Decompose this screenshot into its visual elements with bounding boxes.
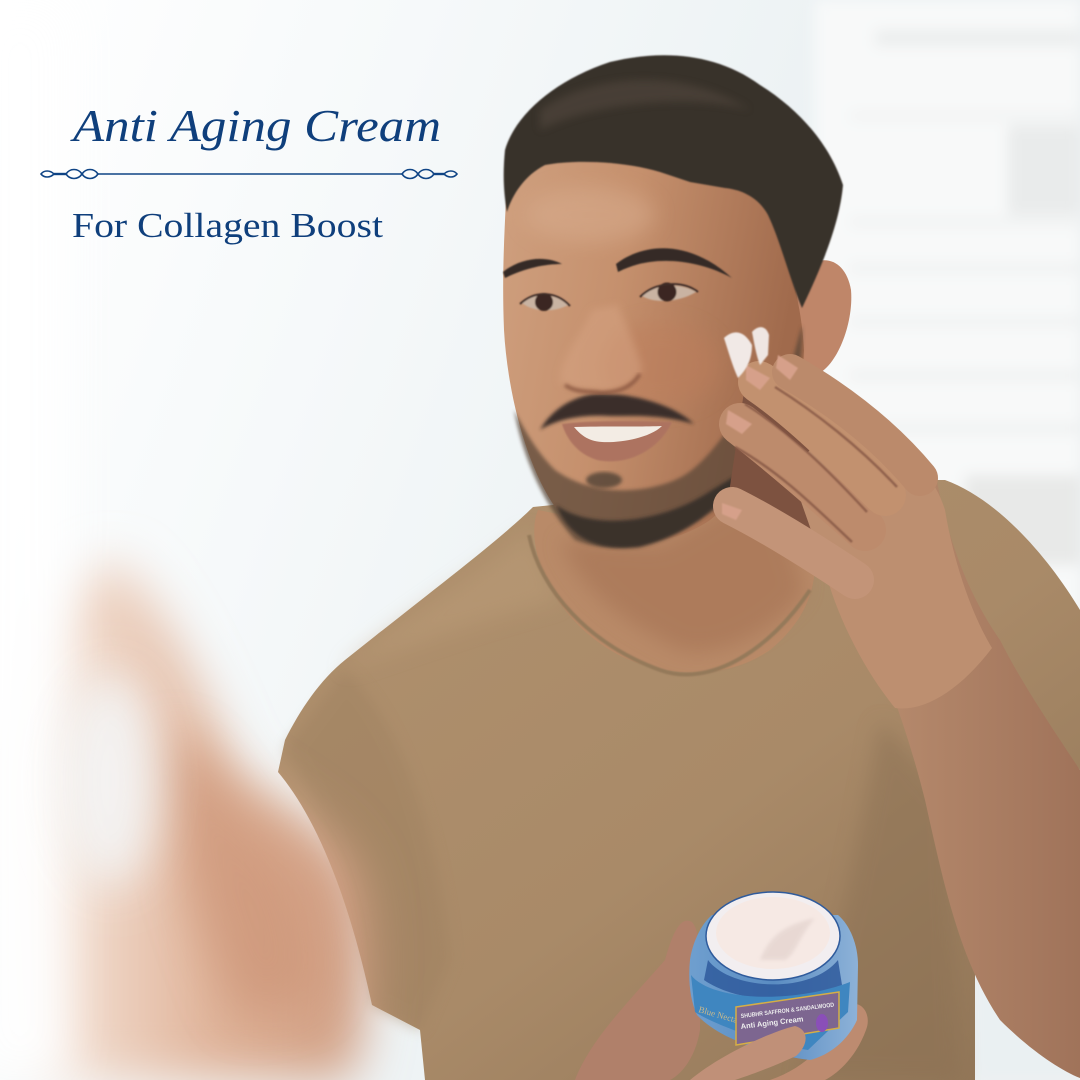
hair highlight — [540, 80, 750, 130]
fingernails — [722, 355, 798, 520]
cream surface — [716, 897, 830, 969]
shadow behind fingers — [725, 360, 930, 590]
cream swirl — [760, 918, 815, 960]
forearm — [855, 470, 1080, 1078]
back of hand — [790, 420, 992, 708]
dark neck band — [704, 960, 842, 999]
nose highlight — [560, 305, 642, 392]
middle finger — [759, 382, 885, 495]
blurred foreground hand — [0, 0, 367, 1080]
face — [503, 141, 804, 544]
lid — [520, 294, 570, 306]
ear — [790, 260, 851, 376]
shirt — [278, 480, 1080, 1080]
jar glass body — [689, 915, 858, 1060]
beard stubble — [514, 325, 802, 547]
subtitle: For Collagen Boost — [72, 206, 383, 245]
shirt shadow folds — [285, 670, 450, 1030]
product jar — [689, 892, 858, 1080]
shirt body — [278, 480, 1080, 1080]
jar rim — [706, 892, 840, 980]
cheek tone — [600, 323, 720, 407]
hand mass — [20, 560, 367, 1080]
lower fingers right — [770, 1004, 868, 1080]
neck shadow — [560, 480, 805, 652]
title block — [41, 100, 457, 245]
teeth — [574, 426, 662, 442]
sunlit shoulder — [340, 530, 560, 670]
cream on cheek — [724, 327, 769, 378]
brand text: Blue Nectar — [697, 1004, 742, 1026]
moustache — [540, 393, 694, 430]
lips — [562, 421, 672, 461]
finger darker edge — [160, 736, 320, 1020]
ring finger — [740, 424, 865, 530]
pale palm highlight — [60, 670, 160, 890]
background: towel radiator — [815, 0, 1080, 1080]
saffron flower icon — [816, 1014, 828, 1032]
eye white — [522, 295, 568, 310]
ornamental divider — [41, 170, 457, 178]
hair — [504, 55, 843, 308]
eyebrow left — [503, 259, 562, 278]
iris — [535, 293, 553, 311]
cream streak 1 — [724, 332, 752, 378]
nostril shadow — [565, 374, 640, 393]
chin patch — [586, 472, 622, 488]
label product name: SHUBHR SAFFRON & SANDALWOOD — [741, 1003, 835, 1020]
iris — [658, 282, 676, 302]
purple product label — [736, 992, 839, 1045]
lid — [640, 284, 698, 297]
forehead highlight — [525, 187, 655, 243]
eyebrow right — [616, 248, 732, 278]
neck — [534, 420, 840, 673]
little finger — [732, 506, 855, 580]
blue label with brand — [691, 975, 850, 1050]
index finger — [790, 372, 920, 478]
eye white — [642, 286, 696, 301]
eye right — [640, 282, 698, 302]
mouth — [562, 421, 672, 461]
title: Anti Aging Cream — [70, 100, 441, 151]
finger gaps — [735, 387, 897, 542]
cream streak 2 — [752, 327, 769, 365]
jar-holding hand — [575, 921, 868, 1080]
palm and thumb side — [575, 921, 701, 1080]
shirt collar — [529, 535, 810, 674]
label subtitle: Anti Aging Cream — [740, 1014, 804, 1031]
white haze at left edge — [0, 0, 70, 1080]
nose — [560, 305, 642, 393]
forearm and hand — [722, 355, 1080, 1078]
eye left — [520, 293, 570, 311]
thumb over label — [690, 1026, 806, 1080]
